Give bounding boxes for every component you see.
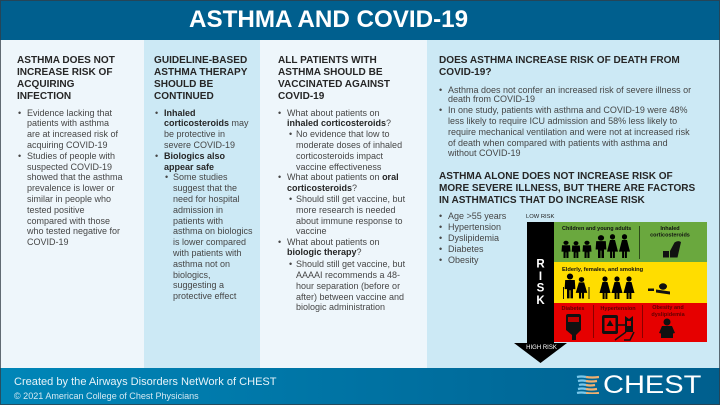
bullet list: be protective in xyxy=(164,129,225,139)
logo: CHEST xyxy=(576,372,701,399)
bullet list: What about patients on xyxy=(287,237,380,247)
heading: risk factors: IN ASTHMATICS THAT DO INCREASE RISK xyxy=(439,195,645,206)
bullet list: admission in xyxy=(173,205,223,215)
logo wordmark: CHEST xyxy=(603,372,701,399)
bullet list: risk factors: • xyxy=(439,244,442,254)
bullet list: • xyxy=(155,108,158,118)
bullet list: • xyxy=(278,108,281,118)
green band: corticosteroids xyxy=(650,232,690,238)
footer xyxy=(0,368,720,405)
bullet list: with patients with xyxy=(173,248,242,258)
bullet list: vaccine effectiveness xyxy=(296,162,381,172)
heading xyxy=(17,55,115,102)
bullet list: • xyxy=(165,172,168,182)
heading: INFECTION xyxy=(17,91,71,102)
bullet list: risk factors: Dyslipidemia xyxy=(448,233,499,243)
bullet list: risk factors xyxy=(439,211,506,265)
bullet list: hour separation (before or xyxy=(296,281,400,291)
bullet list: • xyxy=(18,151,21,161)
bullet list xyxy=(278,108,406,312)
bullet list: AAAAI recommends a 48- xyxy=(296,270,400,280)
heading: risk factors: MORE SEVERE ILLNESS, BUT THERE ARE FACTORS xyxy=(439,183,695,194)
bullet list: inhaled corticosteroids? xyxy=(287,118,391,128)
heading: INCREASE RISK OF xyxy=(17,67,112,78)
bullet list: death: Asthma does not confer an increased risk of severe illness or xyxy=(448,85,691,95)
bullet list: are at increased risk of xyxy=(27,129,118,139)
heading: ALL PATIENTS WITH xyxy=(278,55,377,66)
heading: CONTINUED xyxy=(154,91,214,102)
bullet list: biologics, xyxy=(173,270,211,280)
red band: dyslipidemia xyxy=(651,312,686,318)
bullet list: after) between vaccine and xyxy=(296,292,404,302)
yellow band xyxy=(554,262,707,303)
bullet list: risk factors: Obesity xyxy=(448,255,479,265)
bullet list: patients with asthma xyxy=(27,118,109,128)
risk arrow: S xyxy=(537,282,545,294)
bullet list: death: In one study, patients with asthma and COVID-19 were 48% xyxy=(448,105,687,115)
bullet list: death: require mechanical ventilation and were not at increased risk xyxy=(448,127,690,137)
heading: risk factors: ASTHMA ALONE DOES NOT INCREASE RISK OF xyxy=(439,171,673,182)
red band: Diabetes xyxy=(562,306,584,312)
bullet list: Biologics also xyxy=(164,151,225,161)
bullet list: vaccine xyxy=(296,226,327,236)
bullet list: • xyxy=(155,151,158,161)
logo mark xyxy=(576,375,599,394)
heading xyxy=(154,55,248,102)
bullet list: biologic therapy? xyxy=(287,247,362,257)
bullet list: patients with xyxy=(173,216,223,226)
heading: risk of death xyxy=(439,55,680,78)
bullet list: appear safe xyxy=(164,162,214,172)
heading: ACQUIRING xyxy=(17,79,74,90)
bullet list: similar in people who xyxy=(27,194,111,204)
heading: ASTHMA SHOULD BE xyxy=(278,67,383,78)
red band: Hypertension xyxy=(600,306,636,312)
bullet list: compared with those xyxy=(27,216,110,226)
bullet list: death: less likely to require ICU admission and 58% less likely to xyxy=(448,116,677,126)
bullet list xyxy=(18,108,123,247)
bullet list: acquiring COVID-19 xyxy=(27,140,108,150)
bullet list: No evidence that low to xyxy=(296,129,390,139)
bullet list: What about patients on xyxy=(287,108,380,118)
bullet list: corticosteroids may xyxy=(164,118,249,128)
bullet list: risk factors: • xyxy=(439,222,442,232)
bullet list: corticosteroids impact xyxy=(296,151,383,161)
green band: Inhaled xyxy=(660,226,680,232)
bullet list: suggesting a xyxy=(173,280,224,290)
heading: risk of death: COVID-19? xyxy=(439,67,491,78)
heading: risk of death: DOES ASTHMA INCREASE RISK OF DEATH FROM xyxy=(439,55,680,66)
red band: Obesity and xyxy=(652,305,684,311)
bullet list: • xyxy=(289,194,292,204)
bullet list: death: of death when compared with patients with asthma and xyxy=(448,138,668,148)
bullet list: biologic administration xyxy=(296,302,385,312)
heading: risk factors xyxy=(439,171,695,206)
heading: VACCINATED AGAINST xyxy=(278,79,390,90)
risk arrow: K xyxy=(536,295,545,307)
red band xyxy=(554,303,707,342)
bullet list: • xyxy=(289,259,292,269)
panel: guideline-based therapy xyxy=(144,40,260,368)
header banner xyxy=(0,0,720,40)
heading xyxy=(278,55,390,102)
bullet list xyxy=(155,108,253,301)
bullet list: prevalence is lower or xyxy=(27,183,115,193)
bullet list: about immune response to xyxy=(296,216,403,226)
bullet list: risk factors: • xyxy=(439,233,442,243)
heading: SHOULD BE xyxy=(154,79,213,90)
bullet list: Inhaled xyxy=(164,108,196,118)
copyright: © 2021 American College of Chest Physicians xyxy=(14,391,199,401)
bullet list: COVID-19 xyxy=(27,237,69,247)
bullet list: corticosteroids? xyxy=(287,183,357,193)
bullet list: suggest that the xyxy=(173,183,237,193)
bullet list: • xyxy=(18,108,21,118)
panel: vaccination xyxy=(260,40,427,368)
green band xyxy=(554,222,707,262)
bullet list: more research is needed xyxy=(296,205,396,215)
risk arrow xyxy=(514,222,567,363)
bullet list: risk factors: Age >55 years xyxy=(448,211,506,221)
bullet list: Should still get vaccine, but xyxy=(296,259,405,269)
bullet list: risk factors: • xyxy=(439,211,442,221)
bullet list: risk factors: Diabetes xyxy=(448,244,484,254)
bullet list: need for hospital xyxy=(173,194,240,204)
bullet list: showed that the asthma xyxy=(27,172,123,182)
bullet list: moderate doses of inhaled xyxy=(296,140,402,150)
title: ASTHMA AND COVID-19 xyxy=(189,6,468,33)
bullet list: suspected COVID-19 xyxy=(27,162,112,172)
risk arrow: HIGH RISK xyxy=(526,345,557,351)
bullet list: • xyxy=(278,237,281,247)
bullet list: Evidence lacking that xyxy=(27,108,112,118)
green band: Children and young adults xyxy=(562,226,631,232)
bullet list: What about patients on oral xyxy=(287,172,399,182)
risk arrow: R xyxy=(536,258,545,270)
bullet list: severe COVID-19 xyxy=(164,140,235,150)
credit line: Created by the Airways Disorders NetWork of CHEST xyxy=(14,376,277,388)
risk arrow: I xyxy=(539,271,542,283)
bullet list: death: without COVID-19 xyxy=(448,148,521,158)
chart: risk stratification xyxy=(514,214,707,363)
heading: GUIDELINE-BASED xyxy=(154,55,247,66)
bullet list: death: • xyxy=(439,85,442,95)
bullet list: Some studies xyxy=(173,172,228,182)
bullet list: death: • xyxy=(439,105,442,115)
bullet list: • xyxy=(289,129,292,139)
bullet list: tested positive xyxy=(27,205,85,215)
bullet list: protective effect xyxy=(173,291,236,301)
panel: risk of death and risk factors xyxy=(427,40,720,368)
bullet list: Studies of people with xyxy=(27,151,115,161)
low risk label: LOW RISK xyxy=(526,214,554,220)
heading: ASTHMA THERAPY xyxy=(154,67,247,78)
bullet list: who tested negative for xyxy=(27,226,120,236)
bullet list: asthma on biologics xyxy=(173,226,253,236)
bullet list: death xyxy=(439,85,691,158)
bullet list: death: death from COVID-19 xyxy=(448,94,535,104)
bullet list: asthma not on xyxy=(173,259,230,269)
bullet list: is lower compared xyxy=(173,237,246,247)
heading: COVID-19 xyxy=(278,91,324,102)
bullet list: risk factors: • xyxy=(439,255,442,265)
yellow band: Elderly, females, and smoking xyxy=(562,267,644,273)
bullet list: • xyxy=(278,172,281,182)
heading: ASTHMA DOES NOT xyxy=(17,55,115,66)
panel: asthma does not increase risk of infection xyxy=(0,40,144,368)
bullet list: risk factors: Hypertension xyxy=(448,222,501,232)
bullet list: Should still get vaccine, but xyxy=(296,194,405,204)
